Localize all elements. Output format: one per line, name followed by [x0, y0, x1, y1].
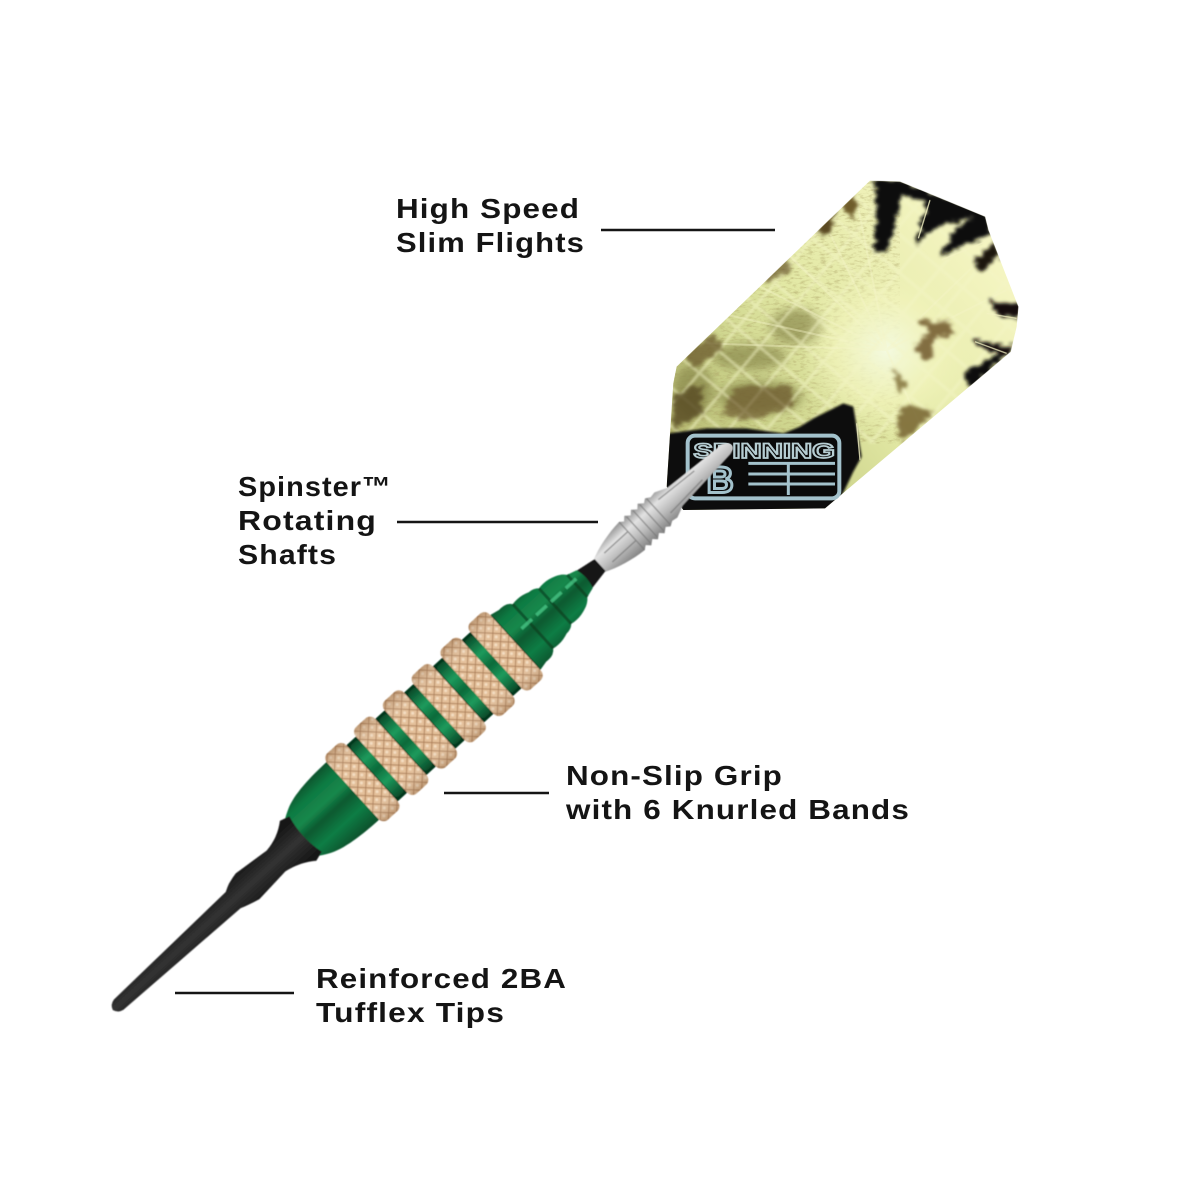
flight	[660, 177, 1027, 513]
grip: green core and grooves	[324, 614, 542, 822]
barrel nose	[271, 761, 381, 870]
label: Spinster Rotating Shafts: Spinster™	[238, 471, 392, 502]
flight logo: Spinning Bee: B	[707, 459, 734, 501]
label: Spinster Rotating Shafts: Shafts	[238, 539, 337, 570]
flight logo: Spinning Bee	[688, 436, 839, 501]
callout: flights	[396, 193, 775, 258]
dart body along axis	[82, 412, 762, 1043]
label: Non-Slip Grip with 6 Knurled Bands	[565, 760, 910, 825]
flight logo: Spinning Bee: SPINNING	[693, 439, 835, 463]
leader line	[397, 521, 598, 523]
label: Spinster Rotating Shafts: Rotating	[238, 505, 377, 536]
callout: shafts	[238, 471, 598, 570]
dart illustration	[82, 177, 1027, 1043]
label: Reinforced 2BA Tufflex Tips: Reinforced 2BA	[316, 963, 567, 994]
callout: grip	[444, 760, 910, 825]
label: Non-Slip Grip with 6 Knurled Bands: Non-Slip Grip	[566, 760, 783, 791]
label: Non-Slip Grip with 6 Knurled Bands: with 6 Knurled Bands	[565, 794, 910, 825]
shaft	[585, 430, 745, 581]
label: High Speed Slim Flights	[396, 193, 585, 258]
callout: tips	[175, 963, 567, 1028]
leader line	[175, 992, 294, 994]
soft tip	[95, 814, 324, 1030]
leader line	[444, 792, 549, 794]
infographic canvas	[110, 180, 1018, 1028]
six knurled bands	[322, 609, 546, 824]
label: Reinforced 2BA Tufflex Tips	[316, 963, 567, 1028]
label: Spinster Rotating Shafts	[238, 471, 392, 570]
label: Reinforced 2BA Tufflex Tips: Tufflex Tips	[316, 997, 505, 1028]
label: High Speed Slim Flights: Slim Flights	[396, 227, 585, 258]
leader line	[601, 229, 775, 231]
label: High Speed Slim Flights: High Speed	[396, 193, 580, 224]
barrel rear: stepped green taper	[487, 537, 626, 673]
